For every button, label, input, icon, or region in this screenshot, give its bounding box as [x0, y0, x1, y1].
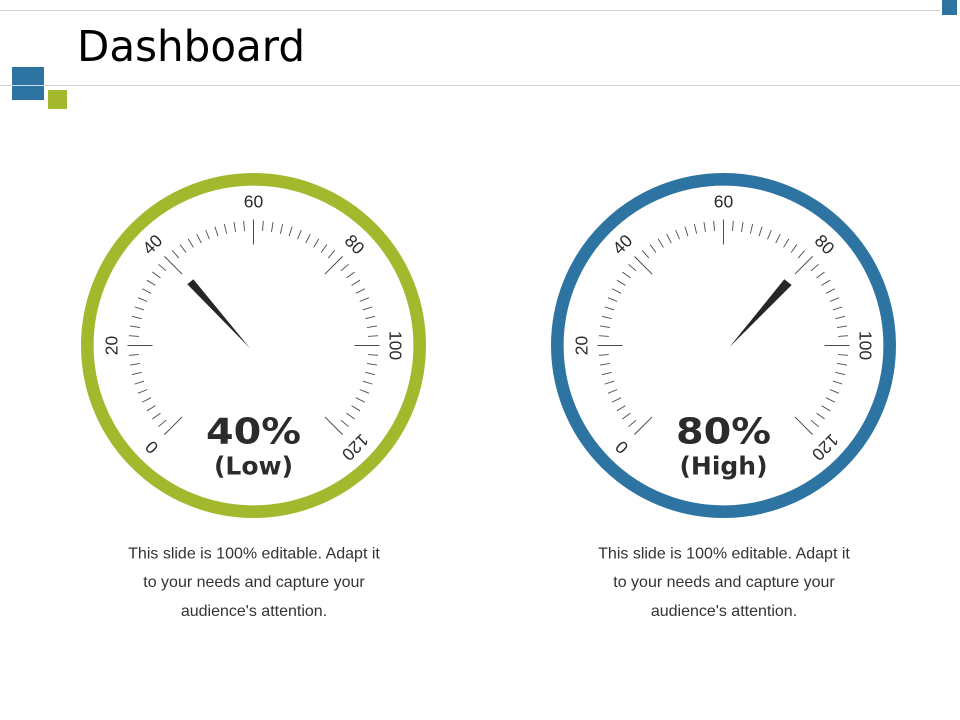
gauge scale labels: 20	[102, 336, 122, 355]
gauge scale labels: 20	[572, 336, 592, 355]
text block: left caption: audience's attention.	[181, 603, 327, 620]
text block: left caption: This slide is 100% editable. Adapt it	[128, 546, 380, 562]
gauge ring: green	[87, 179, 420, 512]
gauge scale labels: 40	[608, 230, 637, 258]
text block: right caption: audience's attention.	[651, 603, 797, 620]
gauge status: (Low)	[214, 452, 293, 480]
gauge scale labels	[572, 192, 876, 465]
gauge needle at 80	[729, 279, 792, 347]
text block: left caption	[128, 546, 380, 620]
header rule	[0, 85, 960, 86]
gauge scale ticks	[598, 220, 850, 435]
gauge scale ticks	[128, 220, 380, 435]
text block: right caption: to your needs and capture your	[613, 574, 835, 591]
gauge scale labels: 80	[341, 230, 369, 259]
gauge scale labels: 40	[138, 230, 167, 258]
gauge value: 40%	[206, 412, 301, 452]
gauge ring: blue	[557, 179, 890, 512]
gauge scale labels: 0	[611, 437, 632, 458]
gauge value: 80%	[676, 412, 771, 452]
panel: right gauge	[557, 179, 890, 512]
gauge scale labels: 120	[338, 430, 373, 465]
panel: left gauge	[87, 179, 420, 512]
gauge status: (High)	[679, 452, 768, 480]
gauge scale labels	[102, 192, 406, 465]
text block: right caption	[598, 546, 850, 620]
text block: left caption: to your needs and capture your	[143, 574, 365, 591]
corner square: top right	[942, 0, 957, 15]
gauge scale labels: 60	[244, 192, 263, 212]
title: Dashboard	[77, 22, 305, 72]
gauge scale labels: 100	[386, 331, 406, 360]
gauge scale labels: 100	[856, 331, 876, 360]
logo: overlapping squares	[12, 67, 67, 109]
gauge scale labels: 80	[811, 230, 839, 259]
gauge scale labels: 120	[808, 430, 843, 465]
gauge scale labels: 60	[714, 192, 733, 212]
gauge needle at 40	[187, 279, 250, 348]
text block: right caption: This slide is 100% editable. Adapt it	[598, 546, 850, 562]
gauge scale labels: 0	[141, 437, 162, 458]
top rule	[0, 10, 940, 11]
